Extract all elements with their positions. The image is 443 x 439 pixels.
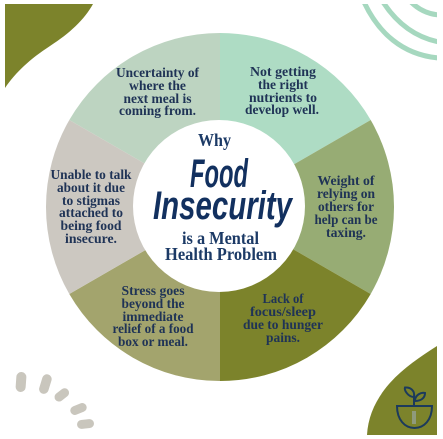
- segment: relying on others: Weight of: [318, 173, 375, 188]
- segment: stigma: [46, 120, 220, 294]
- segment: stigma: insecure.: [65, 231, 117, 246]
- segment: relying on others: help can be: [314, 212, 378, 227]
- top-left olive blob: [5, 4, 93, 88]
- segment: nutrients: Not getting: [250, 64, 316, 79]
- segment: stress: immediate: [122, 309, 184, 324]
- bottom-left grey dashes: [15, 372, 94, 429]
- segment: stigma: attached to: [59, 205, 123, 220]
- segment: stress: box or meal.: [118, 334, 188, 349]
- segment: nutrients: [220, 33, 371, 207]
- center circle with title: [133, 120, 305, 292]
- segment: nutrients: develop well.: [245, 102, 319, 117]
- center circle with title: Health Problem: [165, 244, 277, 264]
- center circle with title: Food: [190, 152, 249, 196]
- center circle with title: Why: [198, 130, 231, 150]
- donut chart: [46, 33, 394, 381]
- segment: uncertainty: Uncertainty of: [116, 65, 199, 80]
- segment: stigma: to stigmas: [62, 193, 120, 208]
- segment: stigma: Unable to talk: [50, 167, 132, 182]
- center circle with title: is a Mental: [182, 228, 259, 248]
- bottom-right olive blob: [367, 346, 437, 435]
- segment: stigma: being food: [60, 218, 122, 233]
- segment: stress: relief of a food: [112, 321, 194, 336]
- segment: focus and sleep: due to hunger: [243, 317, 323, 332]
- segment: relying on others: taxing.: [326, 225, 366, 240]
- top-right mint arcs: [364, 2, 439, 58]
- center circle with title: Insecurity: [153, 184, 293, 228]
- segment: stress: [69, 207, 220, 381]
- segment: stigma: about it due: [57, 180, 125, 195]
- segment: uncertainty: where the: [129, 78, 186, 93]
- segment: nutrients: nutrients to: [249, 90, 317, 105]
- segment: relying on others: relying on: [317, 186, 375, 201]
- segment: stress: Stress goes: [122, 283, 184, 298]
- segment: relying on others: [220, 120, 394, 294]
- icon: plant and fork in bowl: [397, 387, 432, 428]
- segment: stress: beyond the: [122, 296, 185, 311]
- segment: focus and sleep: pains.: [266, 330, 300, 345]
- segment: nutrients: the right: [258, 77, 308, 92]
- segment: uncertainty: coming from.: [119, 103, 196, 118]
- segment: uncertainty: [69, 33, 220, 207]
- segment: focus and sleep: [220, 207, 371, 381]
- segment: focus and sleep: focus/sleep: [250, 304, 316, 319]
- segment: focus and sleep: Lack of: [262, 291, 304, 306]
- segment: uncertainty: next meal is: [124, 91, 192, 106]
- segment: relying on others: others for: [318, 199, 374, 214]
